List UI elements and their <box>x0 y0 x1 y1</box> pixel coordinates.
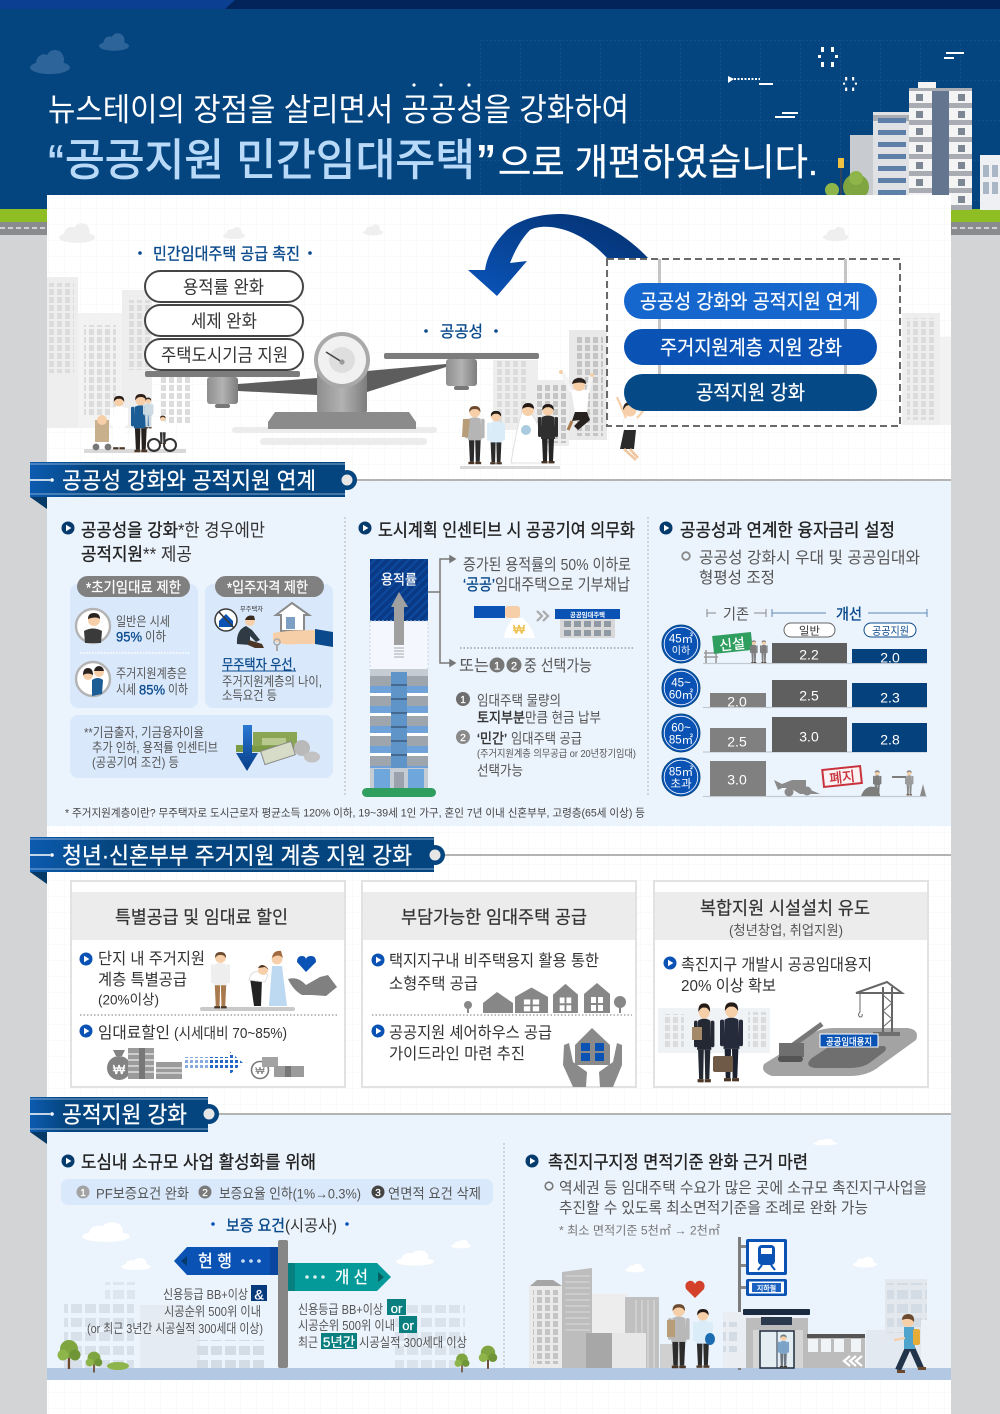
legend headers: 일반 <box>799 623 820 637</box>
arrow: branching bracket <box>428 556 455 666</box>
row: 45 to 60: 2.3 <box>880 689 900 705</box>
row: 60 to 85: 2.5 <box>727 733 747 749</box>
icon: city skyline <box>529 1268 682 1368</box>
text: small houses <box>372 952 599 993</box>
text: improved requirements: 최근 <box>298 1335 318 1350</box>
column 3 heading: 공공성과 연계한 융자금리 설정 <box>680 520 895 540</box>
row: 45 to 60: 2.0 <box>727 693 747 709</box>
column 1 heading: *한 경우에만 <box>178 520 265 540</box>
text: station-area easing <box>545 1179 927 1237</box>
text: rate adjustment: 공공성 강화시 우대 및 공공임대와 <box>699 549 920 567</box>
icon: walking student <box>894 1314 926 1373</box>
panel: three easing items: 연면적 요건 삭제 <box>388 1185 481 1201</box>
icon: balance scale <box>145 332 539 445</box>
text: rate adjustment: 형평성 조정 <box>699 569 775 587</box>
icon: money with down arrow <box>236 725 320 771</box>
text: general rent: 95% <box>116 628 142 644</box>
row: under 45: 2.2 <box>799 646 819 662</box>
heading: publicness <box>424 323 498 341</box>
text: no-house priority <box>222 656 322 703</box>
panel: initial rent limit: *초기임대료 제한 <box>86 579 181 596</box>
column 1 heading <box>62 520 265 564</box>
pill: floor-area ratio easing: 용적률 완화 <box>183 277 264 297</box>
icon: couple portrait <box>76 662 110 696</box>
text: or choose: 1 <box>494 660 500 672</box>
section 3 heading ribbon <box>30 1097 951 1144</box>
icon: house on hand <box>273 603 333 651</box>
text: tier rent: 이하 <box>168 682 188 697</box>
section 1 heading ribbon: 공공성 강화와 공적지원 연계 <box>62 467 316 493</box>
icon: excavator and abolished stamp: 폐지 <box>828 768 856 787</box>
text: no-house priority: 무주택자 우선, <box>222 656 296 672</box>
icon: new sign with workers: 신설 <box>718 635 746 654</box>
panel: special supply and rent discount <box>71 881 345 1087</box>
row: 60 to 85 <box>662 714 927 752</box>
section 3: public support reinforcement <box>30 1097 951 1380</box>
text: station-area easing: 역세권 등 임대주택 수요가 많은 곳에 소규모 촉진지구사업을 <box>559 1179 927 1197</box>
row: 45 to 60 <box>662 669 927 709</box>
text: public donation: ‘공공’ <box>463 577 495 594</box>
header banner <box>0 0 1000 210</box>
panel: complex support facilities <box>654 881 928 1087</box>
panel: initial rent limit <box>70 576 198 708</box>
panel: three easing items: 보증요율 인하(1%→0.3%) <box>219 1185 361 1201</box>
text: option 1: 임대주택 물량의 <box>477 692 561 708</box>
text: general rent <box>116 614 170 644</box>
title line 2: 공공지원 민간임대주택 <box>65 136 475 185</box>
row: over 85 <box>662 758 926 796</box>
section 2 heading ribbon <box>30 837 951 884</box>
icon: jumping man <box>559 370 594 430</box>
panel: complex support facilities: (청년창업, 취업지원) <box>729 923 843 938</box>
icon: business couple with skyline <box>658 1002 770 1082</box>
heading: private supply: 민간임대주택 공급 촉진 <box>153 244 300 263</box>
title line 2: ” <box>476 136 496 185</box>
row: 45 to 60: 60㎡ <box>669 688 694 701</box>
text: special supply <box>80 950 205 1007</box>
row: over 85: 85㎡ <box>669 765 694 778</box>
text: option 2: 선택가능 <box>477 762 523 778</box>
icon: new sign with workers <box>704 632 768 663</box>
text: option 1: 토지부분 <box>477 709 525 725</box>
icon: row of houses <box>464 983 626 1013</box>
pill: housing tier support: 주거지원계층 지원 강화 <box>660 336 842 359</box>
panel: eligibility limit: *입주자격 제한 <box>227 579 308 596</box>
pill: housing fund support <box>145 339 303 370</box>
panel: special supply and rent discount: 특별공급 및 임대료 할인 <box>115 907 288 927</box>
pill: tax easing <box>145 305 303 336</box>
text: option 1: 1 <box>460 695 466 706</box>
text: current requirements: & <box>254 1286 264 1302</box>
row: 60 to 85: 2.8 <box>880 731 900 747</box>
panel: three easing items: PF보증요건 완화 <box>96 1185 189 1201</box>
heading: guarantee requirements: 보증 요건 <box>226 1217 285 1235</box>
row: over 85: 3.0 <box>727 771 747 787</box>
sign: current <box>174 1247 278 1275</box>
text: public land <box>664 956 872 995</box>
icon: subway station <box>723 1279 951 1368</box>
text: tier rent <box>116 666 188 697</box>
row: 60 to 85: 60~ <box>671 722 691 734</box>
text: option 1: 만큼 현금 납부 <box>525 709 601 725</box>
panel: complex support facilities: 복합지원 시설설치 유도 <box>700 898 870 918</box>
panel: fund support: 추가 인하, 용적률 인센티브 <box>92 740 218 755</box>
panel: three easing items: 2 <box>202 1188 208 1199</box>
title line 2 <box>47 136 818 185</box>
text: public land: 20% 이상 확보 <box>681 977 776 995</box>
title line 2: 으로 개편하였습니다. <box>498 142 818 183</box>
text: or choose <box>459 657 592 675</box>
text: general rent: 일반은 시세 <box>116 614 170 629</box>
text: option 2: 2 <box>460 733 466 744</box>
icon: money decreasing <box>107 1048 304 1080</box>
icon: clouds <box>30 33 129 74</box>
icon: sitting homeless person: 무주택자 <box>240 604 263 613</box>
icon: subway sign <box>738 1237 787 1370</box>
text: rent discount: (시세대비 70~85%) <box>174 1025 287 1042</box>
text: option 2: ‘민간’ <box>477 730 507 746</box>
text: public donation <box>463 556 631 594</box>
text: improved requirements <box>298 1299 467 1350</box>
legend headers: 공공지원 <box>872 624 909 637</box>
icon: money bag to public housing <box>474 606 620 638</box>
icon: construction land with crane: 공공임대용지 <box>826 1036 872 1048</box>
text: station-area easing: * 최소 면적기준 5천㎡ → 2천㎡ <box>559 1222 720 1237</box>
chart: building floor-area illustration <box>362 559 436 797</box>
panel: balance scale hero <box>47 214 951 469</box>
text: current requirements: (or 최근 3년간 시공실적 300세대 이상) <box>87 1321 263 1336</box>
panel: fund support <box>70 715 333 778</box>
icon: excavator and abolished stamp <box>774 766 926 796</box>
row: 45 to 60: 45~ <box>671 677 691 689</box>
icon: hands holding a shared house <box>563 1028 622 1087</box>
pill: public support: 공적지원 강화 <box>696 381 805 404</box>
column 1 heading: 공적지원 <box>81 544 143 564</box>
column 1 heading: ** 제공 <box>143 544 192 564</box>
row: 60 to 85: 3.0 <box>799 728 819 744</box>
row: under 45: 2.0 <box>880 649 900 665</box>
icon: subway sign: 지하철 <box>757 1283 776 1292</box>
text: small houses: 소형주택 공급 <box>389 975 478 993</box>
pill: public support <box>624 374 877 411</box>
text: option 1 <box>456 692 601 725</box>
text: current requirements <box>87 1285 267 1336</box>
pill: housing fund support: 주택도시기금 지원 <box>161 345 288 365</box>
icon: man portrait <box>76 609 110 643</box>
row: under 45 <box>662 625 927 665</box>
title line 2: “ <box>47 136 65 185</box>
icon: family with stroller <box>84 394 186 453</box>
text: improved requirements: or <box>402 1318 414 1333</box>
text: public donation: 임대주택으로 기부채납 <box>495 576 630 594</box>
panel: fund support: **기금출자, 기금융자이율 <box>84 725 204 740</box>
section 2 heading ribbon: 청년·신혼부부 주거지원 계층 지원 강화 <box>62 842 412 868</box>
text: rent discount <box>80 1024 287 1042</box>
text: or choose: 중 선택가능 <box>524 657 592 675</box>
icon: jumping woman <box>617 397 651 460</box>
main white sheet <box>47 195 951 1414</box>
text: or choose: 2 <box>511 660 517 672</box>
panel: three easing items: 1 <box>80 1188 86 1199</box>
column heading: promotion district: 촉진지구지정 면적기준 완화 근거 마련 <box>548 1152 808 1172</box>
heading: guarantee requirements: (시공사) <box>285 1217 337 1235</box>
text: special supply: 단지 내 주거지원 <box>98 950 205 968</box>
panel: affordable housing supply <box>362 881 636 1087</box>
row: over 85: 초과 <box>670 777 692 790</box>
row: under 45: 45㎡ <box>669 632 694 645</box>
icon: sparkles and planes <box>728 47 964 118</box>
text: tier rent: 주거지원계층은 <box>116 666 187 681</box>
chart: building floor-area illustration: 용적률 <box>381 571 417 587</box>
text: improved requirements: 5년간 <box>323 1335 355 1350</box>
icon: header skyline <box>825 82 1000 210</box>
heading: guarantee requirements <box>211 1217 349 1235</box>
panel: dashed public support box <box>607 259 900 426</box>
pill: publicness link: 공공성 강화와 공적지원 연계 <box>640 290 860 313</box>
text: current requirements: 시공순위 500위 이내 <box>164 1304 261 1319</box>
text: option 2: 임대주택 공급 <box>511 730 582 746</box>
legend headers: 개선 <box>836 606 862 623</box>
panel: fund support: (공공기여 조건) 등 <box>92 755 179 770</box>
text: public donation: 증가된 용적률의 50% 이하로 <box>463 556 631 574</box>
icon: signpost <box>174 1240 391 1368</box>
arrow: curved blue arrow <box>468 214 648 296</box>
icon: construction land with crane <box>763 982 917 1076</box>
title line 1: 뉴스테이의 장점을 살리면서 공공성을 강화하여 <box>48 91 629 127</box>
text: improved requirements: 신용등급 BB+이상 <box>298 1302 383 1317</box>
legend headers <box>707 606 927 637</box>
text: current requirements: 신용등급 BB+이상 <box>163 1287 248 1302</box>
row: 60 to 85: 85㎡ <box>669 733 694 746</box>
text: improved requirements: 시공실적 300세대 이상 <box>359 1335 467 1350</box>
text: tier rent: 85% <box>139 681 165 697</box>
icon: money bag to public housing: ₩ <box>513 622 526 636</box>
section 3 heading ribbon: 공적지원 강화 <box>62 1101 187 1127</box>
icon: newlyweds and caring hand <box>200 951 337 1011</box>
column heading: small-scale projects: 도심내 소규모 사업 활성화를 위해 <box>81 1152 316 1172</box>
icon: young couple and newlyweds <box>460 403 560 469</box>
text: no-house priority: 소득요건 등 <box>222 688 277 703</box>
sign: improved: 개 선 <box>335 1268 368 1287</box>
text: option 2: (주거지원계층 의무공급 or 20년장기임대) <box>477 747 636 760</box>
text: special supply: 계층 특별공급 <box>98 971 187 989</box>
section 2: housing tier support <box>30 837 951 1087</box>
background: clouds, city and trees <box>58 1139 877 1373</box>
text: share house: 가이드라인 마련 추진 <box>389 1045 525 1063</box>
text: general rent: 이하 <box>145 629 166 644</box>
text: public land: 촉진지구 개발시 공공임대용지 <box>681 956 872 974</box>
icon: money decreasing: ₩ <box>255 1066 265 1077</box>
text: or choose: 또는 <box>459 657 489 675</box>
icon: money decreasing: ₩ <box>113 1062 126 1077</box>
footnote: * 주거지원계층이란? 무주택자로 도시근로자 평균소득 120% 이하, 19~39세 1인 가구, 혼인 7년 이내 신혼부부, 고령층(65세 이상) 등 <box>65 805 645 819</box>
text: share house: 공공지원 셰어하우스 공급 <box>389 1024 552 1042</box>
row: 45 to 60: 2.5 <box>799 687 819 703</box>
sign: current: 현 행 <box>198 1252 232 1271</box>
text: share house <box>372 1024 552 1063</box>
text: improved requirements: or <box>391 1301 403 1316</box>
panel: three easing items <box>61 1179 493 1205</box>
pill: publicness link <box>624 283 877 319</box>
text: rent discount: 임대료할인 <box>98 1024 170 1042</box>
pill: tax easing: 세제 완화 <box>191 311 257 331</box>
chart: loan rates by floor area <box>662 606 927 796</box>
icon: couple with heart <box>667 1281 715 1368</box>
heading: publicness: 공공성 <box>440 323 483 341</box>
text: improved requirements: 시공순위 500위 이내 <box>298 1318 395 1333</box>
column 1 heading: 공공성을 강화 <box>81 520 178 540</box>
panel: three easing items: 3 <box>375 1188 381 1199</box>
icon: money bag to public housing: 공공임대주택 <box>570 610 605 619</box>
section 1 heading ribbon <box>30 462 951 509</box>
section 1: publicness and support link <box>30 462 951 826</box>
pill: floor-area ratio easing <box>145 271 303 302</box>
sign: improved <box>288 1263 391 1291</box>
text: no-house priority: 주거지원계층의 나이, <box>222 674 322 689</box>
background buildings <box>47 223 951 446</box>
text: option 2 <box>456 730 636 778</box>
panel: eligibility limit <box>205 576 333 708</box>
pill: housing tier support <box>624 329 877 365</box>
icon: no house <box>215 609 237 631</box>
text: station-area easing: 추진할 수 있도록 최소면적기준을 조례로 완화 가능 <box>559 1199 868 1217</box>
column 2 heading: 도시계획 인센티브 시 공공기여 의무화 <box>378 520 635 540</box>
panel: affordable housing supply: 부담가능한 임대주택 공급 <box>401 907 587 927</box>
text: small houses: 택지지구내 비주택용지 활용 통한 <box>389 952 599 970</box>
row: under 45: 이하 <box>672 644 690 657</box>
legend headers: 기존 <box>723 606 749 623</box>
text: rate adjustment <box>682 549 920 587</box>
text: tier rent: 시세 <box>116 682 136 697</box>
text: special supply: (20%이상) <box>98 991 159 1007</box>
